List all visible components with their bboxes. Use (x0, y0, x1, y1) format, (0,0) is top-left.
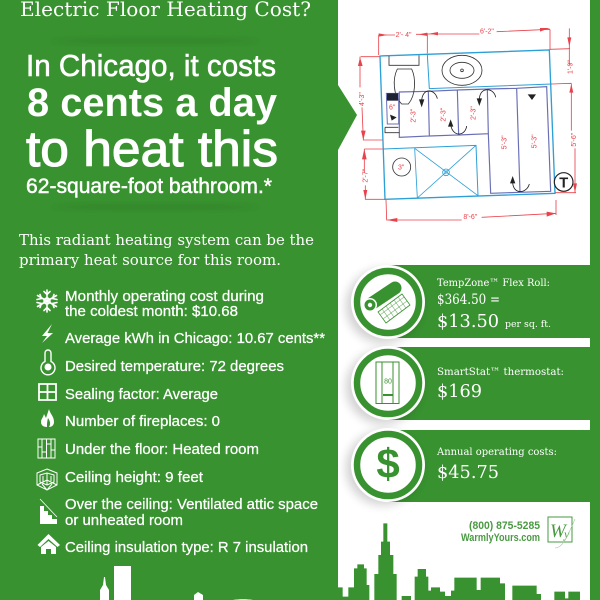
circle shadow (346, 431, 420, 505)
circle shadow (346, 269, 420, 343)
shadow divider top (50, 40, 260, 42)
floor plan: thermostat marker (554, 173, 573, 191)
floor plan: dimension labels: 2'-3" (470, 106, 477, 120)
icon: lightning bolt (42, 324, 53, 343)
intro text (19, 231, 314, 269)
TempZone text: TempZone™ Flex Roll: (437, 277, 550, 289)
floor plan: heating mats (399, 87, 551, 193)
band (388, 265, 590, 338)
arrow pointing to floor plan (338, 85, 357, 150)
TempZone text: $364.50 = (437, 292, 500, 308)
headline block (26, 48, 278, 198)
band (388, 430, 590, 502)
icon: flame (41, 409, 54, 427)
SmartStat text (437, 366, 564, 402)
skyline right (338, 523, 580, 600)
floor plan: dimension labels: 4'-3" (359, 92, 366, 106)
item: under floor: Under the floor: Heated room (65, 442, 259, 458)
floor plan: dimension labels: 2'-7" (362, 168, 369, 183)
logo (548, 517, 575, 548)
item: monthly cost: the coldest month: $10.68 (65, 304, 238, 320)
panel: TempZone cost (346, 265, 590, 343)
TempZone text: per sq. ft. (505, 319, 551, 330)
icon: thermostat: 80 (384, 378, 392, 386)
icon: thermostat (351, 346, 425, 420)
icon: floor heating roll (351, 265, 425, 339)
item: insulation: Ceiling insulation type: R 7 insulation (65, 540, 308, 556)
icon: dollar sign: $ (376, 440, 400, 487)
contact details: WarmlyYours.com (461, 532, 540, 544)
panel: white right column (338, 0, 590, 600)
floor plan: room outline (380, 50, 555, 199)
floor plan: dimension lines (360, 28, 576, 220)
icon: thermometer (41, 350, 55, 375)
list of parameters (37, 289, 325, 556)
skyline left (100, 566, 253, 600)
floor plan: dimension labels: 2'- 4" (396, 32, 412, 39)
panel: annual cost (346, 428, 590, 505)
item: temperature: Desired temperature: 72 degrees (65, 359, 284, 375)
floor plan (358, 28, 578, 222)
floor plan: dimension labels: 5'-3" (502, 135, 509, 149)
floor plan: dimension labels: 2'-3" (440, 107, 447, 122)
item: monthly cost: Monthly operating cost during (65, 289, 264, 305)
TempZone text: $13.50 (437, 311, 499, 332)
contact details: (800) 875-5285 (469, 520, 540, 532)
headline block: to heat this (26, 121, 278, 177)
intro text: This radiant heating system can be the (19, 231, 314, 249)
panel: SmartStat cost (346, 346, 590, 424)
floor plan: dimension arrowheads (358, 28, 577, 222)
icon: floor boards (38, 439, 55, 458)
floor plan: dimension labels: 8'-6" (463, 214, 478, 221)
floor plan: dimension labels: 6" (389, 104, 396, 111)
contact details (461, 520, 540, 544)
floor plan: dimension labels: 1'-9" (568, 60, 575, 74)
floor plan: thermostat marker: T (559, 175, 568, 191)
floor plan: dimension labels: 5'-3" (532, 134, 539, 148)
item: over ceiling (65, 497, 318, 529)
logo: y (563, 527, 570, 541)
band (388, 347, 590, 420)
annual text: $45.75 (437, 462, 499, 483)
icon: snowflake (37, 290, 57, 312)
headline block: 62-square-foot bathroom.* (26, 175, 272, 198)
item: ceiling height: Ceiling height: 9 feet (65, 470, 203, 486)
icon: window (39, 384, 56, 400)
item: over ceiling: Over the ceiling: Ventilated attic space (65, 497, 318, 513)
icon: room cube (37, 469, 57, 490)
shadow divider bottom (50, 206, 260, 208)
floor plan: arrows (422, 90, 529, 192)
headline block: In Chicago, it costs (26, 48, 276, 83)
floor plan: fixtures (385, 55, 482, 176)
TempZone text (437, 277, 551, 332)
logo: W (550, 521, 568, 542)
item: over ceiling: or unheated room (65, 513, 183, 529)
SmartStat text: SmartStat™ thermostat: (437, 366, 564, 378)
annual text (436, 446, 557, 483)
circle shadow (346, 350, 420, 424)
intro text: primary heat source for this room. (19, 251, 281, 269)
item: sealing: Sealing factor: Average (65, 387, 218, 403)
floor plan: dimension labels: 6'-2" (480, 29, 494, 36)
headline block: 8 cents a day (27, 81, 278, 125)
icon: house (38, 534, 60, 554)
item: monthly cost (65, 289, 264, 320)
icon: dollar sign (351, 428, 425, 502)
SmartStat text: $169 (437, 381, 482, 402)
floor plan: dimension labels: 3" (398, 165, 405, 172)
annual text: Annual operating costs: (436, 446, 557, 458)
floor plan: arrowheads (390, 94, 536, 183)
floor plan: dimension labels: 5'-6" (571, 132, 578, 147)
floor plan: sensor block (387, 93, 398, 101)
icon: stairs (40, 499, 57, 524)
item: fireplaces: Number of fireplaces: 0 (65, 414, 220, 430)
floor plan: dimension labels: 2'-3" (410, 108, 417, 123)
floor plan: dimension labels (359, 29, 578, 221)
item: kWh: Average kWh in Chicago: 10.67 cents** (65, 331, 325, 347)
